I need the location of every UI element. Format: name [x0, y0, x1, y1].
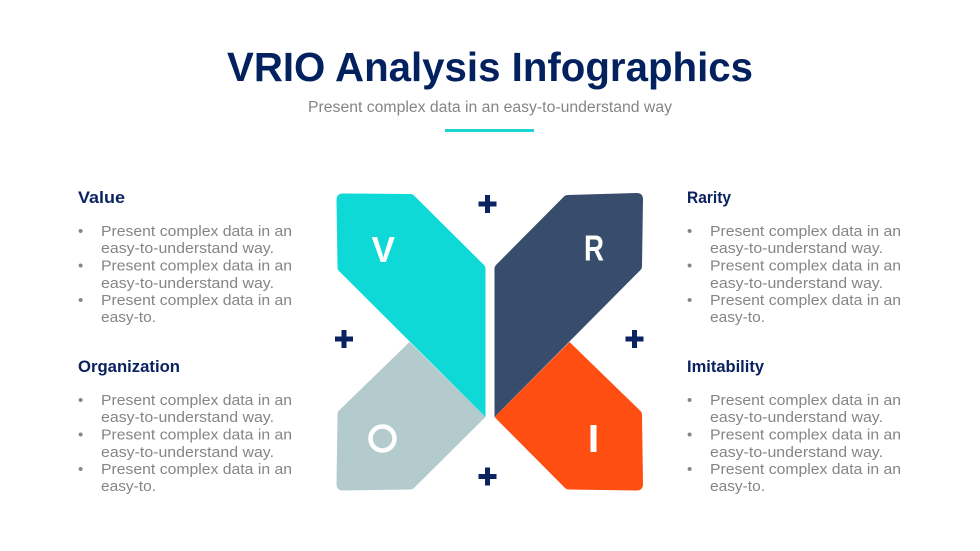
bullet list: organization: Present complex data in an — [101, 426, 292, 444]
heading: rarity: Rarity — [687, 189, 732, 207]
bullet list: organization: easy-to-understand way. — [101, 444, 274, 461]
bullet list: organization: • — [78, 426, 83, 444]
bullet list: value: easy-to-understand way. — [101, 275, 274, 292]
bullet list: value — [78, 223, 292, 326]
bullet list: value: Present complex data in an — [101, 223, 292, 240]
bullet list: organization: • — [78, 392, 83, 409]
bullet list: organization: easy-to. — [101, 478, 156, 495]
bullet list: rarity: • — [687, 258, 692, 274]
bullet list: value: • — [78, 292, 83, 309]
bullet list: imitability: • — [687, 461, 692, 478]
bullet list: value: Present complex data in an — [101, 292, 292, 309]
shape: I orange — [494, 342, 643, 490]
bullet list: imitability: easy-to-understand way. — [710, 409, 883, 426]
bullet list: organization: • — [78, 461, 83, 478]
bullet list: value: easy-to. — [101, 309, 156, 326]
bullet list: imitability: • — [687, 426, 692, 444]
letter R: R — [584, 228, 604, 268]
bullet list: rarity — [687, 223, 901, 326]
title: VRIO Analysis Infographics — [227, 44, 753, 90]
bullet list: imitability: Present complex data in an — [710, 426, 901, 444]
heading: imitability: Imitability — [687, 358, 765, 376]
bullet list: organization: easy-to-understand way. — [101, 409, 274, 426]
shape: R navy — [494, 193, 643, 417]
heading: value: Value — [78, 189, 125, 207]
bullet list: rarity: easy-to. — [710, 309, 765, 326]
panel: organization text — [78, 358, 292, 495]
bullet list: organization — [78, 392, 292, 495]
bullet list: rarity: easy-to-understand way. — [710, 240, 883, 257]
letter V: V — [372, 229, 395, 270]
bullet list: imitability: Present complex data in an — [710, 461, 901, 478]
subtitle: Present complex data in an easy-to-understand way — [308, 99, 672, 116]
bullet list: rarity: Present complex data in an — [710, 223, 901, 240]
bullet list: rarity: Present complex data in an — [710, 292, 901, 309]
shape: V teal — [336, 194, 486, 417]
heading: organization: Organization — [78, 358, 180, 376]
shape: O grey — [336, 342, 486, 490]
bullet list: value: • — [78, 223, 83, 240]
bullet list: rarity: • — [687, 223, 692, 240]
title underline — [445, 129, 534, 132]
bullet list: imitability: easy-to-understand way. — [710, 444, 883, 461]
icon: plus right — [626, 330, 644, 348]
icon: plus left — [335, 330, 353, 348]
panel: rarity text — [687, 189, 901, 326]
panel: imitability text — [687, 358, 901, 495]
bullet list: imitability: easy-to. — [710, 478, 765, 495]
bullet list: organization: Present complex data in an — [101, 461, 292, 478]
bullet list: value: • — [78, 258, 83, 274]
letter I — [590, 425, 596, 452]
letter O — [370, 426, 394, 450]
icon: plus bottom — [478, 468, 496, 486]
bullet list: value: Present complex data in an — [101, 258, 292, 274]
bullet list: imitability: Present complex data in an — [710, 392, 901, 409]
bullet list: organization: Present complex data in an — [101, 392, 292, 409]
bullet list: rarity: • — [687, 292, 692, 309]
bullet list: value: easy-to-understand way. — [101, 240, 274, 257]
bullet list: rarity: easy-to-understand way. — [710, 275, 883, 292]
icon: plus top — [478, 195, 496, 213]
bullet list: rarity: Present complex data in an — [710, 258, 901, 274]
bullet list: imitability: • — [687, 392, 692, 409]
panel: value text — [78, 189, 292, 326]
bullet list: imitability — [687, 392, 901, 495]
